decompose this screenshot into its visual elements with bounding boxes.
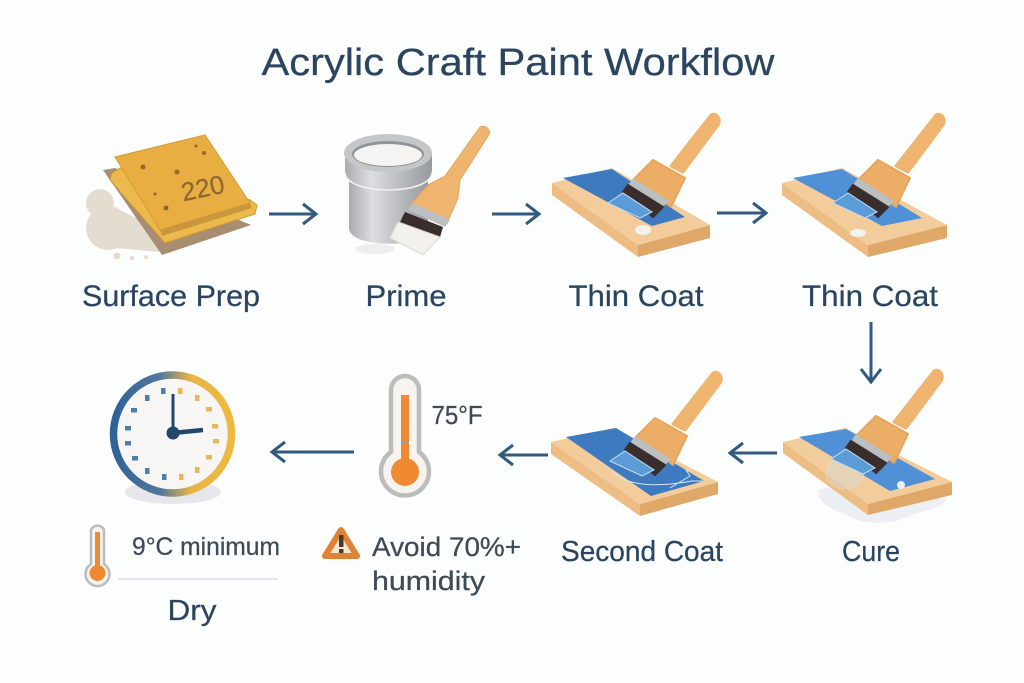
step: cure [783,370,952,568]
arrow: thermometer to dry [272,442,354,462]
text: avoid humidity: humidity [372,566,486,596]
step: temperature [325,376,521,596]
icon: sandpaper sheets: 220 [178,169,227,207]
step: thin coat two [782,114,947,313]
icon: primer can and brush [344,126,490,255]
step: prime [344,126,490,313]
icon: board with brush [782,114,947,257]
label: thin coat: Thin Coat [568,280,704,313]
label: thin coat: Thin Coat [802,280,939,313]
icon: small thermometer [86,526,110,586]
icon: board with brush [552,114,719,257]
icon: warning triangle [325,530,357,556]
icon: board with brush [551,372,721,516]
arrow: thin coat to cure [861,322,881,382]
icon: clock [114,375,232,504]
label: minimum temperature: 9°C minimum [132,533,280,561]
arrow: second coat to thermometer [500,445,548,465]
arrow: cure to second coat [730,443,777,463]
label: temperature: 75°F [432,400,482,430]
label: dry: Dry [168,595,217,627]
label: cure: Cure [842,536,900,568]
step: surface prep [82,135,260,313]
label: second coat: Second Coat [561,536,723,568]
step: second coat [551,372,723,568]
step: thin coat one [552,114,719,313]
callout: humidity warning [325,530,521,596]
arrow: surface prep to prime [269,204,316,224]
label: surface prep: Surface Prep [82,280,260,313]
label: prime: Prime [366,280,446,313]
arrow: thin coat to thin coat [717,203,766,223]
icon: board with brush and spill [783,370,952,523]
step: dry [86,375,280,627]
text: avoid humidity [372,532,521,596]
text: avoid humidity: Avoid 70%+ [372,532,521,562]
arrow: prime to thin coat [492,204,539,224]
icon: thermometer [381,376,429,495]
title: Acrylic Craft Paint Workflow [262,42,775,84]
icon: sandpaper sheets [86,135,257,260]
